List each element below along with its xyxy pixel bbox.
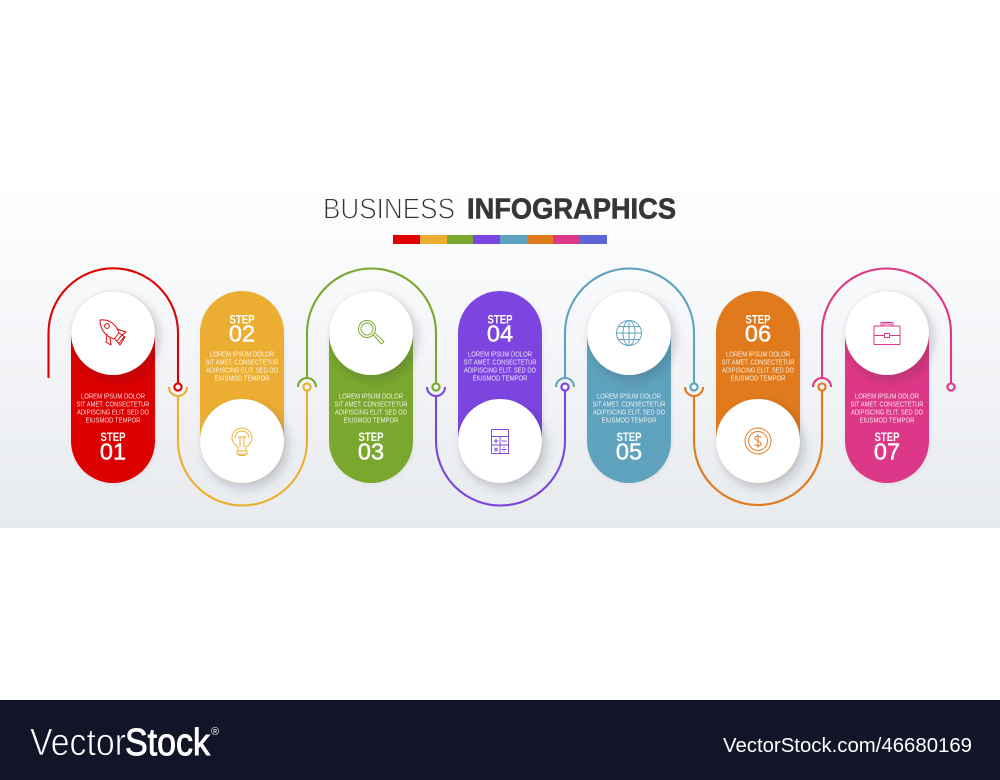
- connector: pink arch: [813, 268, 951, 387]
- step label: 02: [229, 320, 255, 346]
- icon: calculator: [492, 430, 508, 454]
- text block: [592, 394, 666, 424]
- icon: magnifier: [358, 320, 384, 344]
- text block: SIT AMET. CONSECTETUR: [334, 402, 408, 408]
- text block: [464, 352, 536, 382]
- colour bar: [393, 235, 607, 244]
- step label: 05: [616, 438, 642, 464]
- text block: LOREM IPSUM DOLOR: [468, 352, 532, 358]
- icon: briefcase: [874, 322, 900, 344]
- text block: SIT AMET. CONSECTETUR: [850, 402, 924, 408]
- panel: step 04: [458, 291, 542, 483]
- text block: ADIPISCING ELIT. SED DO: [722, 368, 794, 374]
- step label: STEP: [746, 312, 770, 326]
- text block: SIT AMET. CONSECTETUR: [206, 360, 278, 366]
- text block: ADIPISCING ELIT. SED DO: [851, 410, 923, 416]
- step label: 01: [100, 438, 126, 464]
- text block: LOREM IPSUM DOLOR: [726, 352, 790, 358]
- background band: [0, 180, 1000, 528]
- text block: EIUSMOD TEMPOR: [86, 418, 140, 424]
- text block: [206, 352, 278, 382]
- connector: blue arch: [556, 268, 694, 387]
- text block: [76, 394, 150, 424]
- connector: purple curve: [427, 387, 565, 506]
- title: INFOGRAPHICS: [467, 194, 676, 226]
- title: BUSINESS: [323, 194, 455, 226]
- step label: STEP: [358, 430, 384, 444]
- text block: LOREM IPSUM DOLOR: [81, 394, 145, 400]
- panel: step 07: [845, 291, 929, 483]
- footer logo: Stock: [125, 722, 211, 764]
- step label: STEP: [230, 312, 254, 326]
- text block: SIT AMET. CONSECTETUR: [592, 402, 666, 408]
- text block: LOREM IPSUM DOLOR: [339, 394, 403, 400]
- text block: ADIPISCING ELIT. SED DO: [335, 410, 407, 416]
- connector: green arch: [298, 268, 436, 387]
- step label: 07: [874, 438, 900, 464]
- text block: LOREM IPSUM DOLOR: [210, 352, 274, 358]
- text block: EIUSMOD TEMPOR: [602, 418, 656, 424]
- text block: EIUSMOD TEMPOR: [860, 418, 914, 424]
- title: [323, 194, 676, 226]
- footer url: VectorStock.com/46680169: [723, 735, 972, 757]
- step label: STEP: [100, 430, 126, 444]
- text block: ADIPISCING ELIT. SED DO: [206, 368, 278, 374]
- step label: 04: [487, 320, 513, 346]
- text block: SIT AMET. CONSECTETUR: [464, 360, 536, 366]
- icon: rocket: [100, 320, 126, 345]
- text block: LOREM IPSUM DOLOR: [597, 394, 661, 400]
- text block: SIT AMET. CONSECTETUR: [76, 402, 150, 408]
- footer logo: Vector: [30, 722, 126, 764]
- text block: EIUSMOD TEMPOR: [730, 376, 786, 382]
- connector: yellow curve: [169, 387, 307, 506]
- step label: 03: [358, 438, 384, 464]
- text block: ADIPISCING ELIT. SED DO: [464, 368, 536, 374]
- panel: step 01: [71, 291, 155, 483]
- step label: STEP: [616, 430, 642, 444]
- icon: globe: [616, 320, 642, 346]
- icon: coin: [745, 428, 771, 454]
- text block: ADIPISCING ELIT. SED DO: [77, 410, 149, 416]
- text block: [850, 394, 924, 424]
- icon: light bulb: [232, 428, 252, 456]
- text block: EIUSMOD TEMPOR: [214, 376, 270, 382]
- connector: red arch: [48, 268, 178, 387]
- panel: step 05: [587, 291, 671, 483]
- footer logo: ®: [211, 726, 219, 738]
- connector rings: [174, 383, 955, 391]
- panel: step 03: [329, 291, 413, 483]
- footer bar: [0, 700, 1000, 780]
- footer logo: [30, 722, 219, 764]
- text block: ADIPISCING ELIT. SED DO: [593, 410, 665, 416]
- panel: step 02: [200, 291, 284, 483]
- text block: [334, 394, 408, 424]
- text block: LOREM IPSUM DOLOR: [855, 394, 919, 400]
- text block: EIUSMOD TEMPOR: [472, 376, 528, 382]
- connector: orange curve: [685, 387, 822, 505]
- panel: step 06: [716, 291, 800, 483]
- text block: [722, 352, 794, 382]
- step label: STEP: [874, 430, 900, 444]
- step label: 06: [745, 320, 771, 346]
- text block: SIT AMET. CONSECTETUR: [722, 360, 794, 366]
- text block: EIUSMOD TEMPOR: [344, 418, 398, 424]
- step label: STEP: [488, 312, 512, 326]
